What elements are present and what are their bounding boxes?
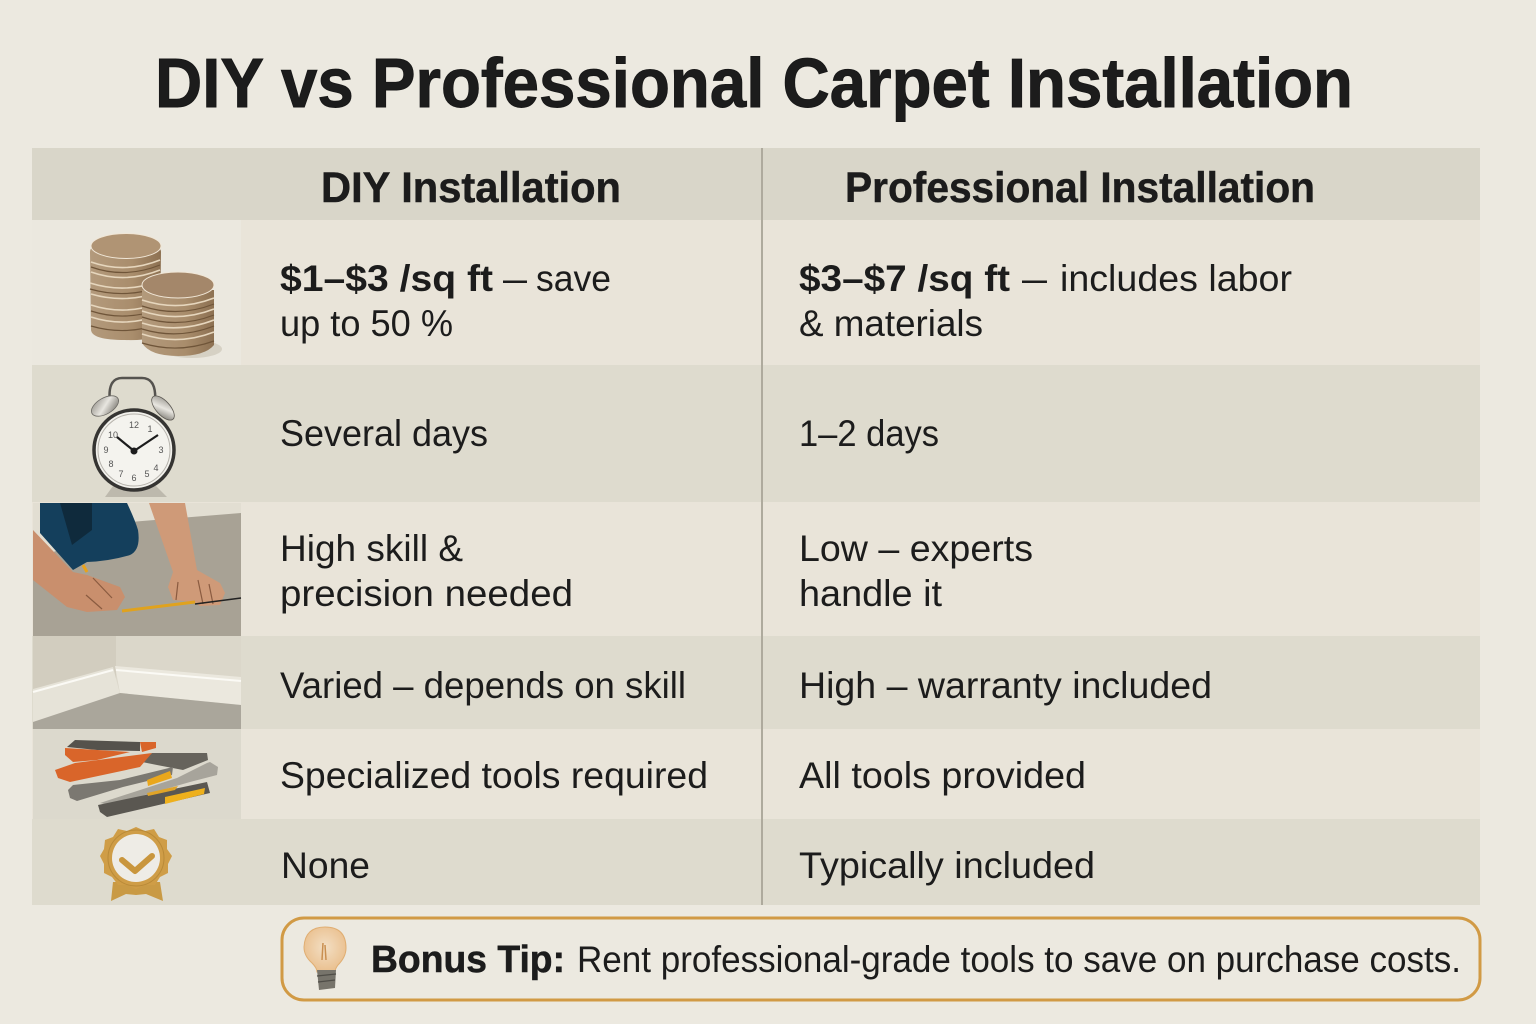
icon: alarm clock: 3 (158, 445, 164, 455)
DIY cost text: up to 50 % (280, 303, 453, 344)
icon: alarm clock: 5 (144, 469, 150, 479)
DIY cost text: – (503, 258, 527, 299)
DIY skill text: precision needed (280, 573, 573, 614)
callout: bonus tip: Rent professional-grade tools to save on purchase costs. (577, 939, 1461, 980)
photo: baseboard corner (33, 636, 241, 729)
DIY cost text (280, 258, 611, 344)
icon: alarm clock: 1 (147, 424, 153, 434)
icon: alarm clock: 6 (131, 473, 137, 483)
comparison table (32, 148, 1480, 905)
icon: hand tools (55, 740, 218, 817)
header row (32, 148, 1480, 220)
professional cost text: & materials (799, 303, 983, 344)
callout: bonus tip (282, 918, 1480, 1000)
icon: alarm clock: 4 (153, 463, 159, 473)
icon: alarm clock: 10 (108, 430, 118, 440)
DIY skill text: High skill & (280, 528, 463, 569)
professional skill text: Low – experts (799, 528, 1033, 569)
row: tools (32, 729, 1480, 819)
DIY cost text: save (536, 258, 611, 299)
icon: warranty badge (100, 827, 172, 901)
DIY cost text: $1–$3 /sq ft (280, 258, 493, 299)
icon: coins (90, 234, 222, 358)
row: skill (32, 502, 1480, 636)
column heading: professional: Professional Installation (845, 164, 1315, 212)
icon: alarm clock: 7 (118, 469, 124, 479)
professional quality text: High – warranty included (799, 665, 1212, 706)
title: DIY vs Professional Carpet Installation (155, 44, 1353, 122)
professional tools text: All tools provided (799, 755, 1086, 796)
row: cost (32, 220, 1480, 365)
icon: alarm clock: 8 (108, 459, 114, 469)
professional cost text (799, 258, 1292, 344)
photo: measuring carpet by hand (33, 503, 241, 636)
professional cost text: $3–$7 /sq ft (799, 258, 1010, 299)
icon: alarm clock: 9 (103, 445, 109, 455)
DIY warranty text: None (281, 845, 370, 886)
bonus tip text: Bonus Tip: (371, 939, 565, 981)
icon: alarm clock (88, 378, 178, 497)
DIY time text: Several days (280, 413, 488, 454)
professional skill text: handle it (799, 573, 943, 614)
icon: light bulb (304, 927, 346, 990)
row: time (32, 365, 1480, 502)
professional time text: 1–2 days (799, 413, 939, 454)
row: warranty (32, 819, 1480, 905)
row: quality (32, 636, 1480, 729)
DIY quality text: Varied – depends on skill (280, 665, 686, 706)
DIY skill text (280, 528, 573, 614)
professional cost text: includes labor (1060, 258, 1292, 299)
column heading: DIY: DIY Installation (321, 164, 621, 212)
column divider (761, 148, 763, 905)
professional skill text (799, 528, 1033, 614)
professional warranty text: Typically included (799, 845, 1095, 886)
DIY tools text: Specialized tools required (280, 755, 708, 796)
professional cost text: – (1022, 258, 1048, 299)
icon: alarm clock: 12 (129, 420, 139, 430)
